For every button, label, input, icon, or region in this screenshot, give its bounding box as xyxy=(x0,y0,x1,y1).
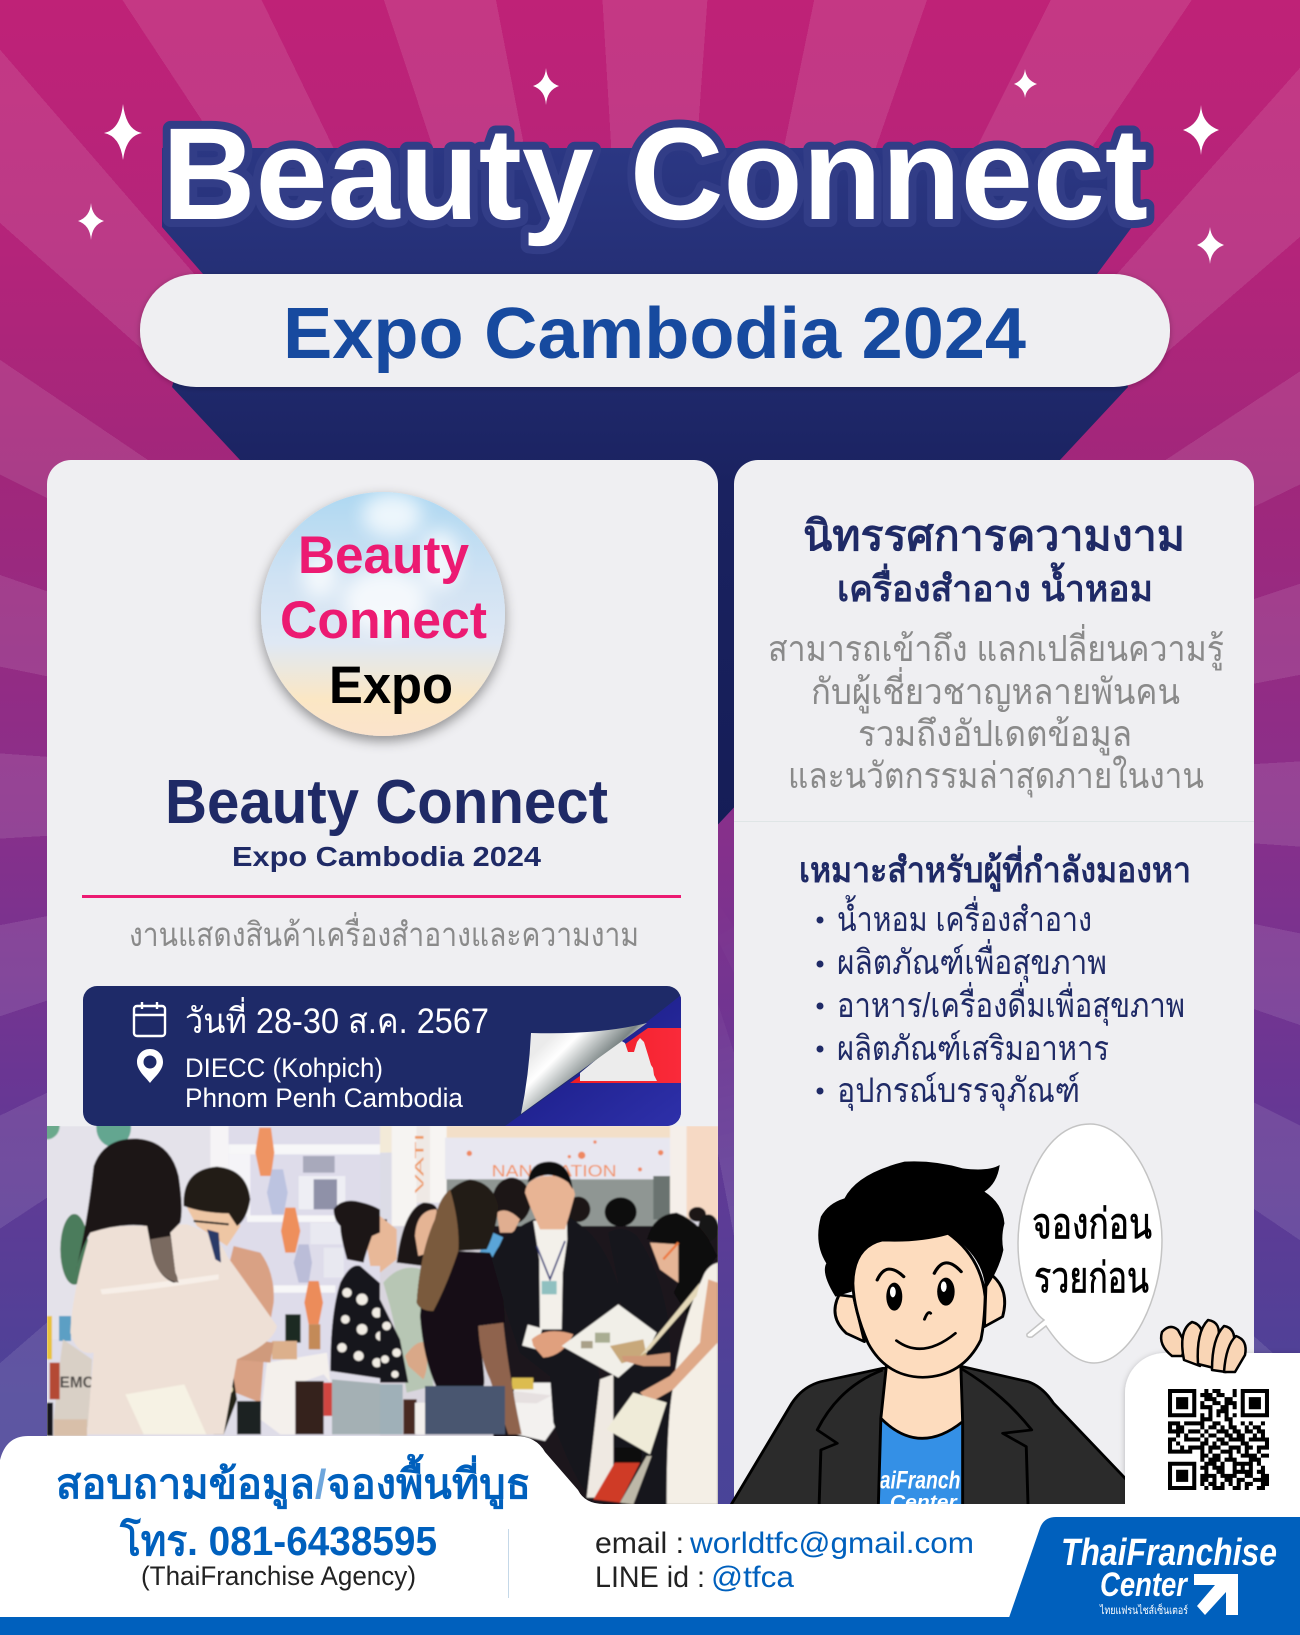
short hair woman xyxy=(230,1246,274,1402)
right half of photo xyxy=(380,1126,718,1506)
hair xyxy=(818,1161,1004,1297)
logo: ThaiFranchise Center: Center xyxy=(1100,1566,1188,1604)
description paragraph: รวมถึงอัปเดตข้อมูล xyxy=(858,713,1132,756)
nose and smile xyxy=(896,1312,955,1349)
text: venue xyxy=(185,1053,464,1113)
bottom blue bar xyxy=(0,1617,1300,1635)
description paragraph: กับผู้เชี่ยวชาญหลายพันคน xyxy=(811,667,1180,714)
speech bubble: รวยก่อน xyxy=(1034,1254,1149,1301)
right half of photo: VATI xyxy=(412,1133,426,1193)
pillar, carpet xyxy=(587,1374,613,1498)
jacket xyxy=(730,1367,1130,1507)
QR code xyxy=(1168,1389,1269,1490)
woman in black tee xyxy=(420,1251,505,1388)
phone number: โทร. 081-6438595 xyxy=(119,1517,437,1564)
face xyxy=(853,1233,985,1377)
agency label: (ThaiFranchise Agency) xyxy=(141,1561,416,1591)
subtitle pill: Expo Cambodia 2024 xyxy=(140,274,1170,387)
icon: Beauty Connect Expo circle logo: Connect xyxy=(280,591,487,650)
table with products xyxy=(260,1353,330,1434)
bullet list: ผลิตภัณฑ์เพื่อสุขภาพ xyxy=(837,939,1107,983)
line id xyxy=(595,1561,794,1594)
subheading: Expo Cambodia 2024: Expo Cambodia 2024 xyxy=(232,841,541,872)
icon: logo arrow xyxy=(1194,1574,1238,1615)
description paragraph: และนวัตกรรมล่าสุดภายในงาน xyxy=(788,755,1204,798)
neck xyxy=(881,1365,963,1438)
heading: beauty exhibition: นิทรรศการความงาม xyxy=(803,512,1185,559)
icon: location pin xyxy=(137,1049,163,1083)
icon: Beauty Connect Expo circle logo: Beauty xyxy=(298,526,469,585)
logo: ThaiFranchise Center xyxy=(1003,1517,1300,1635)
icon: Cambodia flag page curl xyxy=(505,995,681,1126)
blue t-shirt: aiFranch xyxy=(880,1465,960,1494)
left half of photo: EMC xyxy=(60,1375,94,1392)
man in black suit xyxy=(491,1216,582,1428)
woman in white blouse xyxy=(70,1224,277,1434)
subheading: suitable for: เหมาะสำหรับผู้ที่กำลังมองหา xyxy=(799,845,1191,892)
description paragraph xyxy=(768,624,1224,798)
icon: Beauty Connect Expo circle logo xyxy=(261,492,505,736)
QR card xyxy=(1125,1320,1300,1510)
bullet list: น้ำหอม เครื่องสำอาง xyxy=(837,895,1092,939)
photo: exhibition booth crowd xyxy=(34,1108,718,1506)
email: email : xyxy=(595,1527,684,1560)
panel: left event info xyxy=(34,460,718,1510)
bun woman xyxy=(330,1266,387,1379)
logo: ThaiFranchise Center: ไทยแฟรนไชส์เซ็นเตอร์ xyxy=(1099,1603,1188,1617)
text: date: วันที่ 28-30 ส.ค. 2567 xyxy=(185,997,489,1041)
bullet list: อาหาร/เครื่องดื่มเพื่อสุขภาพ xyxy=(837,982,1185,1026)
pink divider xyxy=(82,895,681,898)
table at centre xyxy=(512,1381,556,1442)
character: cartoon mascot xyxy=(730,1161,1130,1513)
icon: Beauty Connect Expo circle logo: Expo xyxy=(329,656,453,715)
lapels xyxy=(817,1368,1032,1507)
green shirt woman xyxy=(397,1203,437,1266)
right woman xyxy=(647,1213,717,1319)
title: Beauty Connect: Beauty Connect xyxy=(162,100,1148,247)
heading: Beauty Connect: Beauty Connect xyxy=(165,768,608,837)
ears xyxy=(835,1295,864,1342)
bun woman continued xyxy=(380,1216,397,1273)
background men xyxy=(566,1197,590,1222)
line id: LINE id : xyxy=(595,1561,705,1594)
blue t-shirt: Center xyxy=(890,1492,958,1513)
subtitle pill: Expo Cambodia 2024: Expo Cambodia 2024 xyxy=(283,294,1026,374)
bullet list: ผลิตภัณฑ์เสริมอาหาร xyxy=(837,1030,1109,1068)
subheading: cosmetics perfume: เครื่องสำอาง น้ำหอม xyxy=(837,562,1153,609)
icon: calendar xyxy=(134,1002,165,1036)
bullet list: อุปกรณ์บรรจุภัณฑ์ xyxy=(837,1072,1080,1111)
description paragraph: สามารถเข้าถึง แลกเปลี่ยนความรู้ xyxy=(768,624,1224,671)
icon: hand holding card xyxy=(1161,1320,1246,1372)
eyes and brows xyxy=(877,1263,961,1311)
background person xyxy=(492,1178,531,1224)
text: venue: Phnom Penh Cambodia xyxy=(185,1083,464,1113)
navy banner shape behind title xyxy=(162,148,1140,897)
bullet list xyxy=(816,895,1185,1111)
thai tagline: งานแสดงสินค้าเครื่องสำอางและความงาม xyxy=(129,912,639,953)
panel: right description xyxy=(730,460,1300,1513)
sparkles xyxy=(78,68,1224,264)
brochure and wallet xyxy=(562,1304,657,1378)
blue t-shirt xyxy=(878,1418,963,1513)
banner lettering and molecules: NANOVATION xyxy=(492,1162,617,1181)
contact heading: สอบถามข้อมูล/จองพื้นที่บูธ xyxy=(56,1454,531,1510)
text: venue: DIECC (Kohpich) xyxy=(185,1053,383,1083)
speech bubble xyxy=(1018,1124,1162,1363)
speech bubble: จองก่อน xyxy=(1032,1200,1152,1247)
email: worldtfc@gmail.com xyxy=(689,1527,974,1560)
info box: date and venue xyxy=(83,986,681,1126)
footer: white contact band xyxy=(0,1436,1300,1635)
line id: @tfca xyxy=(711,1561,794,1594)
left half of photo xyxy=(34,1108,387,1436)
